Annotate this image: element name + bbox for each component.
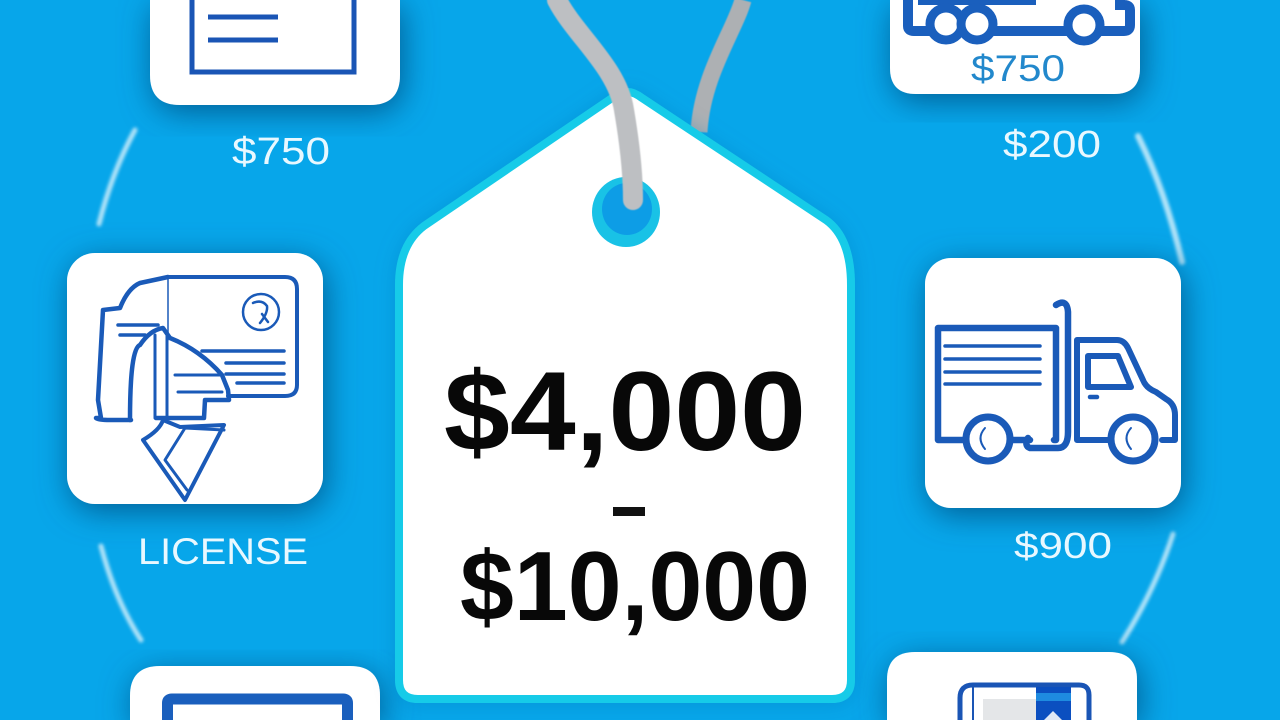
label: left price: $750 xyxy=(232,131,330,173)
icon: box truck xyxy=(938,303,1175,461)
price: dash xyxy=(613,507,645,516)
string: front strand xyxy=(557,0,633,200)
price inside truck card: $750 xyxy=(971,48,1065,89)
label: right price: $200 xyxy=(1003,124,1101,166)
price tag xyxy=(399,0,851,699)
icon: document xyxy=(192,0,354,72)
price: low: $4,000 xyxy=(444,349,806,474)
panel: top-right truck card xyxy=(890,0,1140,94)
decorative ring arcs xyxy=(99,130,1182,642)
icon: truck xyxy=(908,0,1130,41)
icon: book xyxy=(960,685,1089,720)
icon: license card with truck xyxy=(96,277,297,500)
panel: bottom-right card xyxy=(887,652,1137,720)
label: license: LICENSE xyxy=(138,531,308,572)
label: box truck price: $900 xyxy=(1014,525,1112,566)
price: high: $10,000 xyxy=(460,531,810,641)
panel: license card xyxy=(67,253,323,504)
panel: bottom-left card xyxy=(130,666,380,720)
tag hole xyxy=(592,177,660,247)
icon: screen xyxy=(168,699,348,720)
string: back strand xyxy=(699,0,743,132)
panel: top-left document card xyxy=(150,0,400,105)
panel: box truck card xyxy=(925,258,1181,508)
